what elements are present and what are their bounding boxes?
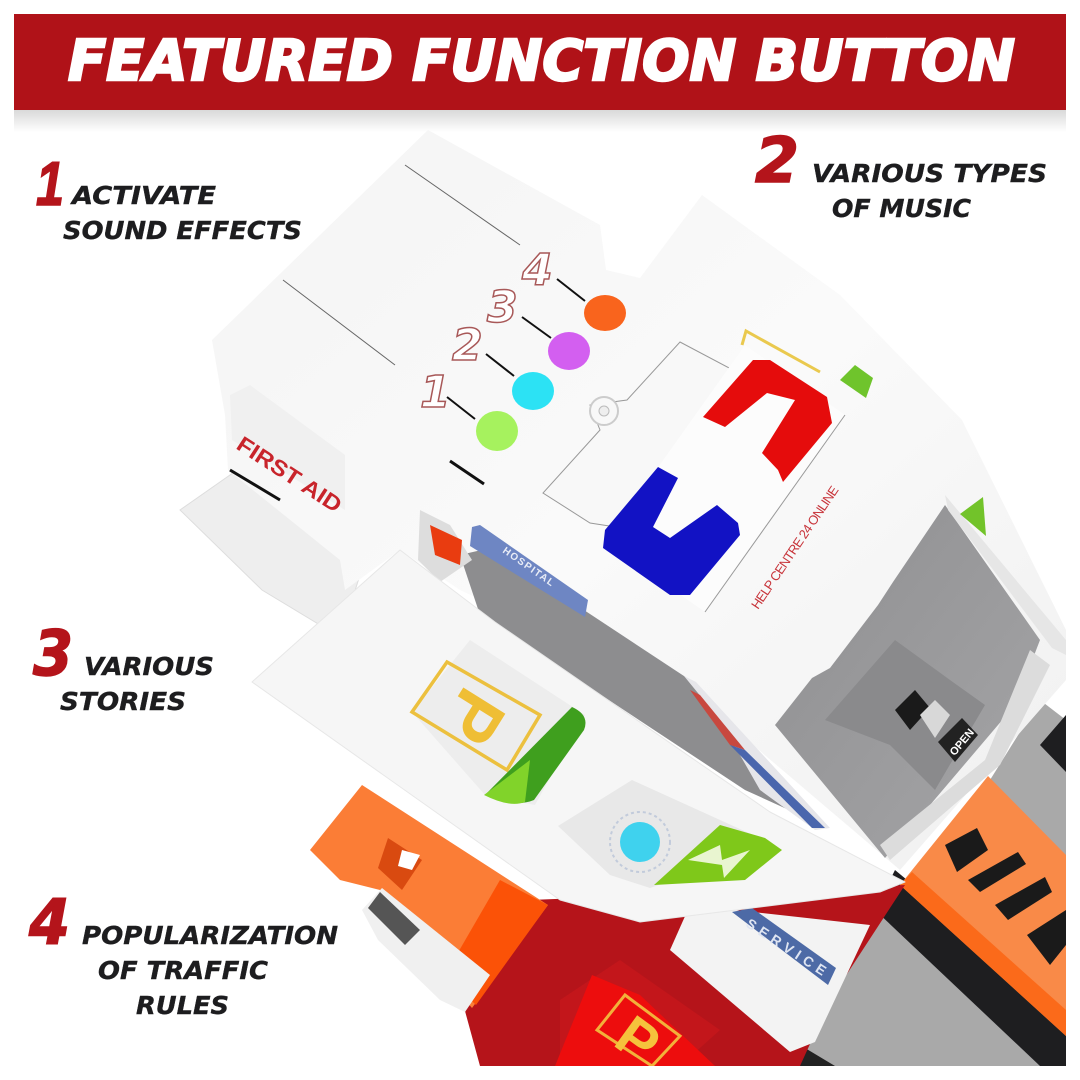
side stripe sticker [684, 676, 830, 830]
lower white side panel with service label: SERVICE [743, 915, 829, 979]
siren plate [664, 368, 734, 536]
outlined button numbers: 4 [521, 245, 553, 296]
grey side channel [460, 548, 800, 815]
outlined button numbers: 2 [452, 320, 483, 371]
side red lamp [418, 510, 472, 582]
right orange ramp [900, 776, 1066, 1036]
title: FEATURED FUNCTION BUTTON [68, 29, 1015, 94]
black slots [230, 461, 484, 500]
ramp slots [945, 828, 988, 872]
white bumper box [362, 888, 490, 1012]
hospital label [470, 525, 588, 617]
label 1: activate sound effects: ACTIVATE [70, 181, 216, 210]
label 3: various stories: 3 [33, 617, 73, 690]
outlined button numbers: 3 [487, 282, 518, 333]
green charging sticker [654, 825, 782, 885]
white truck body [212, 130, 1066, 870]
button leader lines [447, 279, 585, 419]
green trees sticker [485, 707, 586, 803]
first aid text: FIRST AID [232, 431, 347, 518]
label 4: popularization of traffic rules: 4 [28, 886, 70, 959]
label 4: popularization of traffic rules: OF TRAFFIC [98, 956, 268, 985]
label 4: popularization of traffic rules: RULES [136, 991, 229, 1020]
folded white ramp [252, 550, 905, 922]
blue siren [603, 467, 740, 595]
label 2: various types of music: OF MUSIC [832, 194, 971, 223]
orange cab hood [310, 785, 548, 1012]
label 1: activate sound effects [36, 150, 302, 245]
title banner [14, 14, 1066, 110]
left platform [180, 468, 360, 625]
open tag [938, 718, 978, 762]
open tag: OPEN [948, 727, 977, 758]
label 1: activate sound effects: 1 [36, 150, 64, 219]
red parking sign: P [604, 1003, 672, 1076]
lower red cab [462, 885, 905, 1076]
red parking panel [555, 975, 715, 1066]
yellow parking sign [412, 662, 540, 770]
label 1: activate sound effects: SOUND EFFECTS [63, 216, 302, 245]
back yellow sign [742, 331, 820, 372]
charging panel [558, 780, 748, 888]
cab window panels [283, 165, 520, 365]
help centre text: HELP CENTRE 24 ONLINE [748, 483, 842, 612]
label 3: various stories: VARIOUS [84, 652, 214, 681]
function buttons [476, 295, 626, 451]
yellow parking sign: P [427, 675, 520, 758]
red siren [703, 360, 832, 482]
roof hatch outline [543, 342, 733, 540]
green sticker [840, 365, 873, 398]
outlined button numbers: 1 [420, 367, 451, 418]
label 3: various stories [33, 617, 214, 716]
side door panel [230, 385, 345, 510]
shadow below banner [14, 110, 1066, 128]
lower white side panel with service label [670, 905, 870, 1052]
hatch screw [590, 397, 618, 425]
label 2: various types of music: 2 [755, 124, 799, 197]
label 4: popularization of traffic rules: POPULARIZATION [82, 921, 338, 950]
hospital label: HOSPITAL [500, 545, 556, 589]
outlined button numbers [420, 245, 553, 418]
rear road surface [790, 700, 1066, 1066]
label 4: popularization of traffic rules [28, 886, 338, 1020]
blue charging icon [620, 822, 660, 862]
grey interior compartment [775, 495, 1066, 860]
open white door [945, 495, 1066, 655]
label 2: various types of music: VARIOUS TYPES [812, 159, 1047, 188]
label 2: various types of music [755, 124, 1047, 223]
label 3: various stories: STORIES [60, 687, 186, 716]
